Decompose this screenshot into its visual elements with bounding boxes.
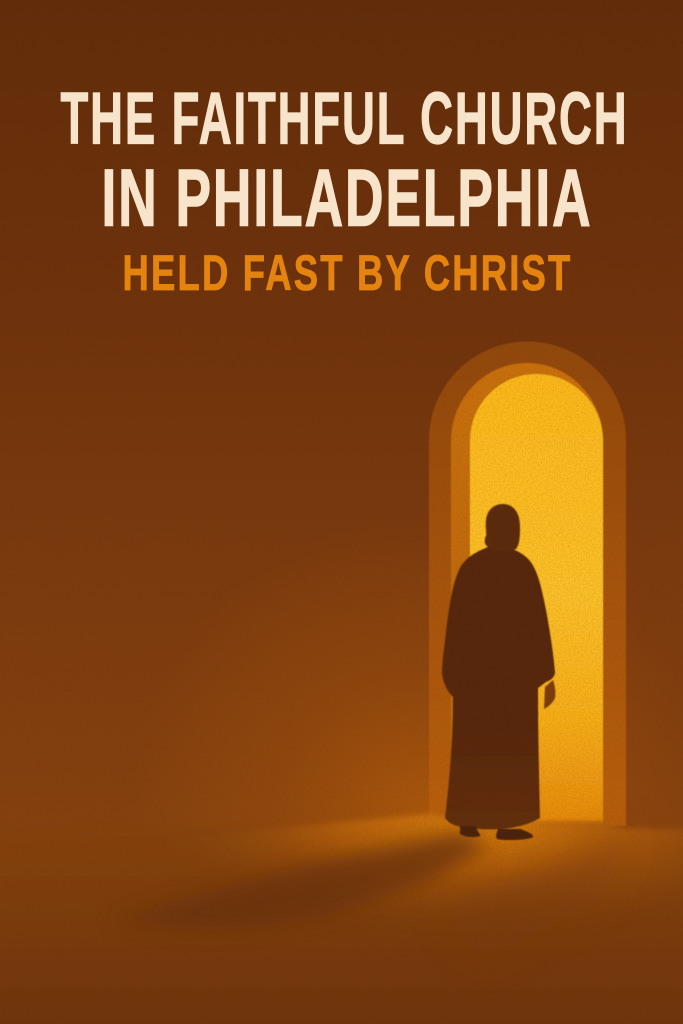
- standing robed figure: [442, 504, 555, 840]
- doorway arch: [429, 341, 626, 826]
- head: [485, 504, 520, 551]
- outer arch: [429, 341, 626, 826]
- left foot: [460, 826, 480, 837]
- title: [60, 78, 628, 243]
- inner arch: [451, 363, 603, 824]
- glowing doorway: [470, 374, 603, 821]
- robe: [442, 547, 555, 829]
- secondary floor shade: [440, 830, 640, 960]
- floor: [0, 814, 683, 1024]
- hand: [544, 680, 555, 709]
- right foot: [496, 829, 533, 840]
- figure shadow on floor: [110, 830, 640, 960]
- main cast shadow: [110, 832, 490, 930]
